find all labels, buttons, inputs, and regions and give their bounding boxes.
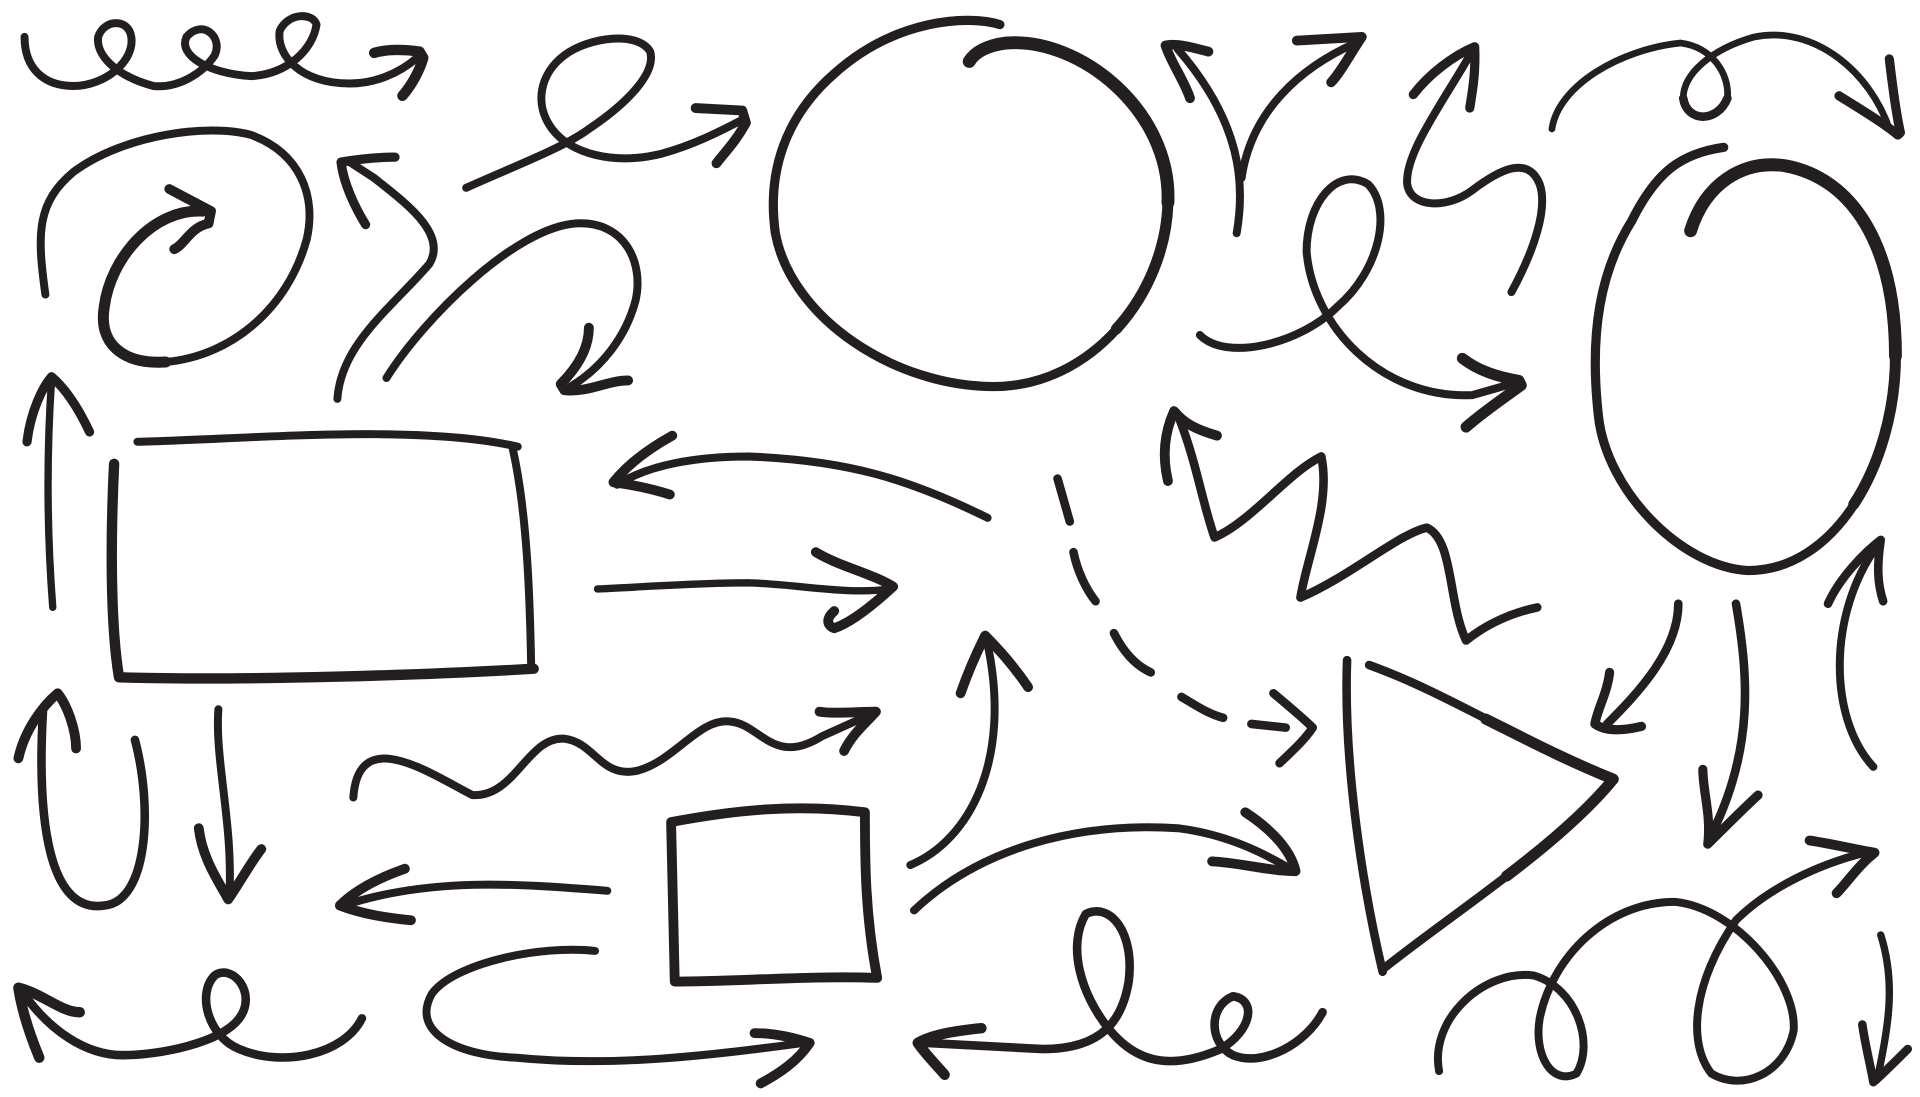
arrow: bottom-right corner down xyxy=(1862,935,1908,1082)
arrow: curve up right edge xyxy=(1828,540,1883,767)
arrow: forked pair xyxy=(1165,37,1362,233)
arrow: wavy xyxy=(353,712,876,798)
arrow: s-curve up xyxy=(337,157,434,399)
arrow: dashed curve xyxy=(1058,479,1313,763)
arrow: bottom-right loops xyxy=(1438,840,1875,1081)
shape: tall oval xyxy=(1595,147,1895,571)
arrow: long left xyxy=(613,436,988,518)
arrow: curve down-left xyxy=(1595,604,1678,730)
shape: large circle xyxy=(773,20,1168,387)
arrow: curve up centre xyxy=(910,636,1028,865)
arrow: long arc right xyxy=(914,812,1296,910)
arrow: straight up xyxy=(27,377,90,607)
arrow: hook down xyxy=(386,223,638,391)
arrow: bottom u-curve right xyxy=(427,950,810,1083)
arrow: short left xyxy=(340,869,607,920)
arrow: u-turn xyxy=(18,693,145,906)
arrow: zigzag xyxy=(1165,411,1537,641)
arrow: bottom-left loop xyxy=(18,973,362,1058)
shape: large rectangle xyxy=(112,434,534,678)
arrow: spiral xyxy=(41,130,309,362)
arrow: top-centre loop xyxy=(466,39,746,188)
arrow: straight down xyxy=(199,709,261,899)
arrow: top-left curly loops xyxy=(25,16,423,96)
arrow: squiggle up xyxy=(1407,47,1542,292)
arrow: long right xyxy=(597,552,893,628)
shape: small square xyxy=(671,808,877,982)
arrow: curve down xyxy=(1703,604,1758,844)
arrow: bottom-centre loops xyxy=(918,911,1323,1075)
shape: triangle xyxy=(1347,660,1613,972)
arrow: looped right xyxy=(1200,179,1521,427)
arrow: top-right loop xyxy=(1552,35,1900,135)
